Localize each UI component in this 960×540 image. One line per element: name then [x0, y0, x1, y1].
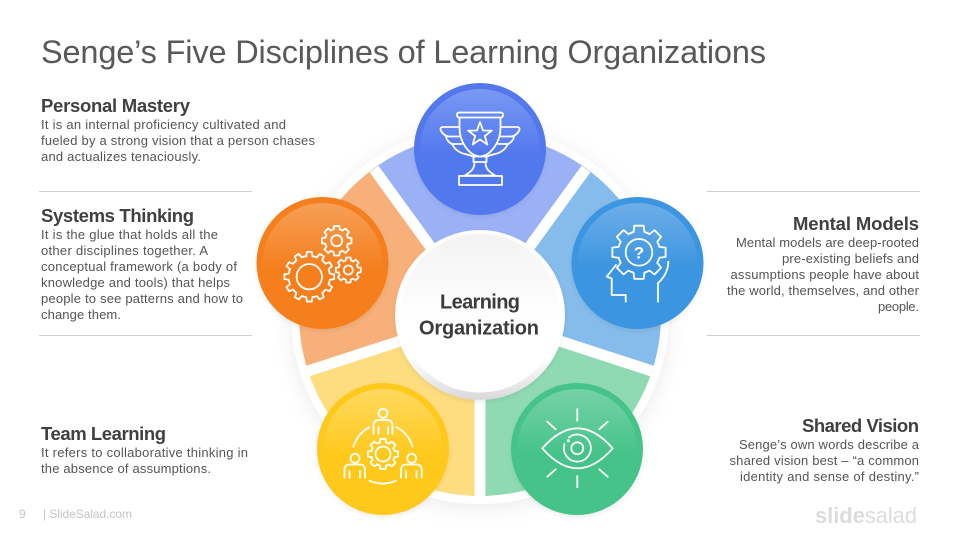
panel: Shared Vision: shared vision best – “a common — [730, 453, 919, 468]
icon: team around gear — [344, 409, 422, 484]
center circle: Organization — [419, 318, 539, 340]
panel: Team Learning: Team Learning — [41, 423, 166, 444]
panel: Systems Thinking: people to see patterns and how to — [41, 291, 243, 306]
panel: Mental Models: pre-existing beliefs and — [782, 251, 919, 266]
panel: Systems Thinking: change them. — [41, 307, 121, 322]
badge: trophy — [414, 83, 546, 215]
panel: Mental Models — [727, 213, 920, 314]
panel: Shared Vision: Senge’s own words describe a — [739, 437, 920, 452]
panel: Mental Models: assumptions people have about — [730, 267, 919, 282]
panel: Systems Thinking: Systems Thinking — [41, 205, 194, 226]
footer: site name: | SlideSalad.com — [43, 507, 132, 521]
panel: Systems Thinking: knowledge and tools) that helps — [41, 275, 230, 290]
panel: Personal Mastery — [41, 95, 316, 164]
icon: trophy — [440, 112, 520, 185]
segment: light blue — [480, 169, 661, 371]
panel: Team Learning: It refers to collaborative thinking in — [41, 445, 248, 460]
icon: head with gear and question mark — [607, 226, 668, 302]
panel: Systems Thinking — [41, 205, 243, 322]
panel: Mental Models: Mental models are deep-rooted — [736, 235, 919, 250]
badge: head with gear — [572, 197, 704, 329]
panel: Personal Mastery: and actualizes tenaciously. — [41, 149, 201, 164]
footer: logo: slidesalad — [815, 503, 917, 528]
badge: team — [317, 383, 449, 515]
panel: Personal Mastery: It is an internal proficiency cultivated and — [41, 117, 286, 132]
panel: Shared Vision: identity and sense of destiny.” — [740, 469, 919, 484]
pentagon diagram — [291, 126, 669, 504]
title: Senge’s Five Disciplines of Learning Organizations — [41, 34, 766, 70]
panel: Systems Thinking: It is the glue that holds all the — [41, 227, 218, 242]
center circle — [395, 230, 565, 400]
segment: green — [480, 315, 652, 496]
panel: Systems Thinking: other disciplines together. A — [41, 243, 208, 258]
panel: Systems Thinking: conceptual framework (a body of — [41, 259, 237, 274]
panel: Shared Vision — [730, 415, 920, 484]
badge: gears — [256, 197, 388, 329]
panel: Mental Models: people. — [878, 299, 919, 314]
panel: Personal Mastery: fueled by a strong vision that a person chases — [41, 133, 316, 148]
footer: page number: 9 — [19, 507, 26, 521]
panel: Shared Vision: Shared Vision — [802, 415, 919, 436]
segment: orange — [299, 169, 480, 371]
icon: gears — [284, 226, 361, 302]
badge: eye — [511, 383, 643, 515]
panel: Mental Models: Mental Models — [793, 213, 919, 234]
segment: yellow — [308, 315, 480, 496]
icon: eye — [542, 409, 613, 487]
panel: Team Learning: the absence of assumptions. — [41, 461, 211, 476]
center circle: Learning — [440, 292, 520, 314]
panel: Mental Models: the world, themselves, and other — [727, 283, 920, 298]
segment: blue — [374, 134, 586, 315]
panel: Team Learning — [41, 423, 248, 476]
panel: Personal Mastery: Personal Mastery — [41, 95, 191, 116]
icon: question mark: ? — [634, 244, 644, 262]
